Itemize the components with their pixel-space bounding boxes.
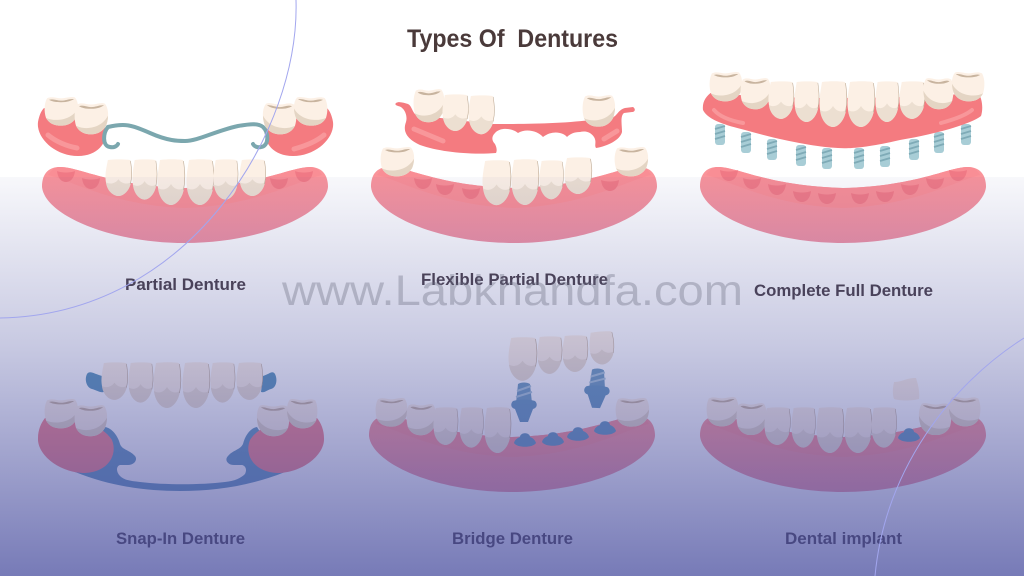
blue frame — [75, 427, 285, 491]
implant posts — [715, 124, 971, 169]
floating crown — [893, 378, 919, 400]
label: Flexible Partial Denture — [421, 270, 608, 289]
empty sockets — [57, 171, 313, 189]
abutments — [514, 421, 616, 447]
panel: flexible partial denture — [371, 89, 657, 289]
upper gum right — [265, 108, 333, 156]
gum — [369, 416, 655, 492]
gum highlights — [48, 135, 324, 149]
plate highlights — [414, 129, 617, 141]
panel: complete full denture — [700, 72, 986, 300]
lower gum — [42, 167, 328, 243]
panel: snap-in denture — [38, 362, 324, 548]
right gum — [248, 417, 324, 473]
left gum — [38, 417, 114, 473]
flexible plate — [395, 102, 635, 154]
gum — [700, 416, 986, 492]
arc top left — [0, 0, 296, 318]
panel: partial denture — [38, 97, 333, 294]
teeth — [707, 397, 980, 453]
label: Snap-In Denture — [116, 529, 245, 548]
remaining teeth — [376, 398, 649, 453]
background gradient overlay — [0, 177, 1024, 576]
label: Dental implant — [785, 529, 902, 548]
panel: bridge denture — [369, 331, 655, 548]
plate highlights — [714, 110, 972, 123]
label: Bridge Denture — [452, 529, 573, 548]
lower gum — [371, 167, 657, 243]
bridge teeth — [508, 331, 615, 381]
lower gum — [700, 167, 986, 243]
upper plate — [703, 92, 982, 148]
empty sockets — [414, 178, 619, 199]
upper teeth — [414, 89, 615, 134]
metal clasp — [104, 124, 267, 147]
arc bottom right — [875, 338, 1024, 576]
upper gum left — [38, 108, 106, 156]
panel: dental implant — [700, 378, 986, 548]
abutment — [898, 428, 920, 442]
title: Types Of Dentures — [407, 25, 618, 53]
upper teeth — [45, 97, 327, 134]
anchor teeth — [45, 399, 317, 436]
implant screws — [511, 368, 611, 422]
lower teeth — [105, 159, 266, 205]
watermark: www.Labkhandfa.com — [281, 267, 743, 315]
upper teeth — [710, 72, 984, 127]
label: Complete Full Denture — [754, 281, 933, 300]
denture teeth — [101, 362, 263, 408]
label: Partial Denture — [125, 275, 246, 294]
sockets — [720, 170, 967, 204]
side tabs — [86, 372, 276, 392]
lower teeth — [381, 147, 648, 205]
